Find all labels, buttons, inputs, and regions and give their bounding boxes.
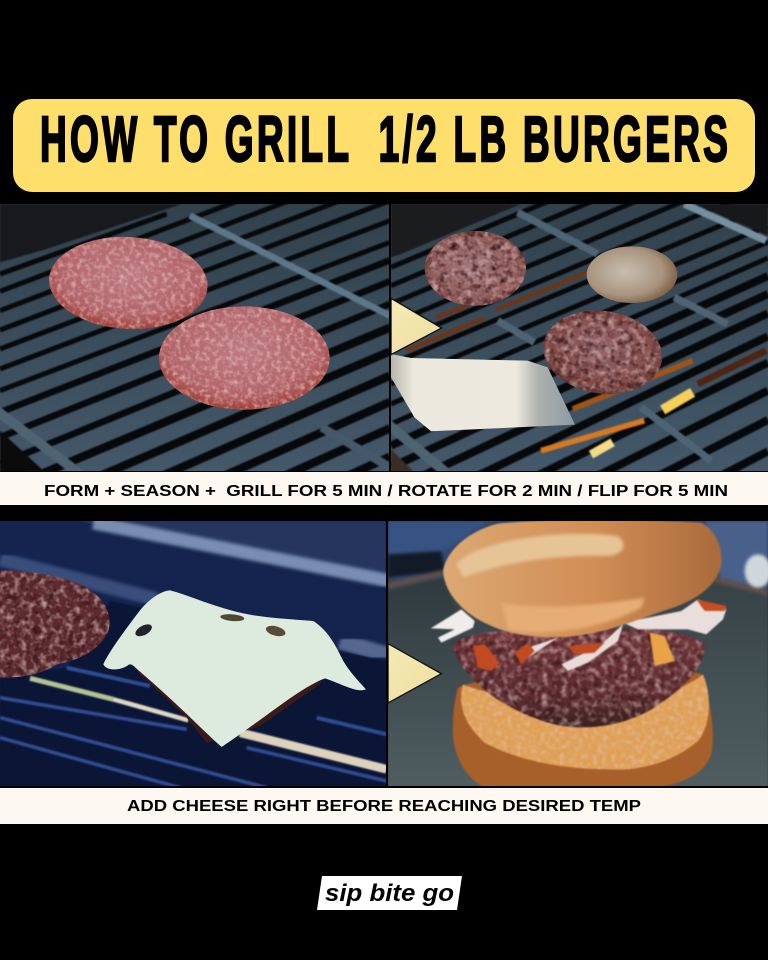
arrow: pointer <box>388 644 441 703</box>
caption strip: bottom <box>0 788 768 824</box>
patty: upper raw patty <box>47 233 210 333</box>
logo <box>317 876 462 910</box>
title banner <box>13 99 755 192</box>
patty under cheese <box>136 670 324 742</box>
flames <box>406 272 766 455</box>
icon: spatula <box>391 354 575 431</box>
onion and sauce <box>431 599 726 671</box>
logo text: sip bite go <box>325 880 454 907</box>
patty: tan patty <box>587 246 677 303</box>
patty: lower raw patty <box>159 306 330 410</box>
arrow: pointer <box>391 298 442 355</box>
title text: HOW TO GRILL 1/2 LB BURGERS <box>40 105 728 176</box>
patty: seared patty <box>425 231 526 306</box>
panel: adding cheese <box>0 518 390 791</box>
caption text: ADD CHEESE RIGHT BEFORE REACHING DESIRED TEMP <box>127 798 641 815</box>
panel: rotating burgers with spatula <box>391 204 768 471</box>
patty: flipped patty <box>543 310 662 394</box>
burger left <box>0 571 110 678</box>
panel: finished burger <box>386 519 768 789</box>
cheese slice <box>103 590 366 747</box>
burger patty <box>453 629 705 727</box>
top bun <box>443 520 722 637</box>
caption text: FORM + SEASON + GRILL FOR 5 MIN / ROTATE FOR 2 MIN / FLIP FOR 5 MIN <box>44 483 728 500</box>
panel: raw patties on grill <box>0 204 389 471</box>
bottom bun <box>453 669 713 788</box>
caption strip: top <box>0 472 768 505</box>
